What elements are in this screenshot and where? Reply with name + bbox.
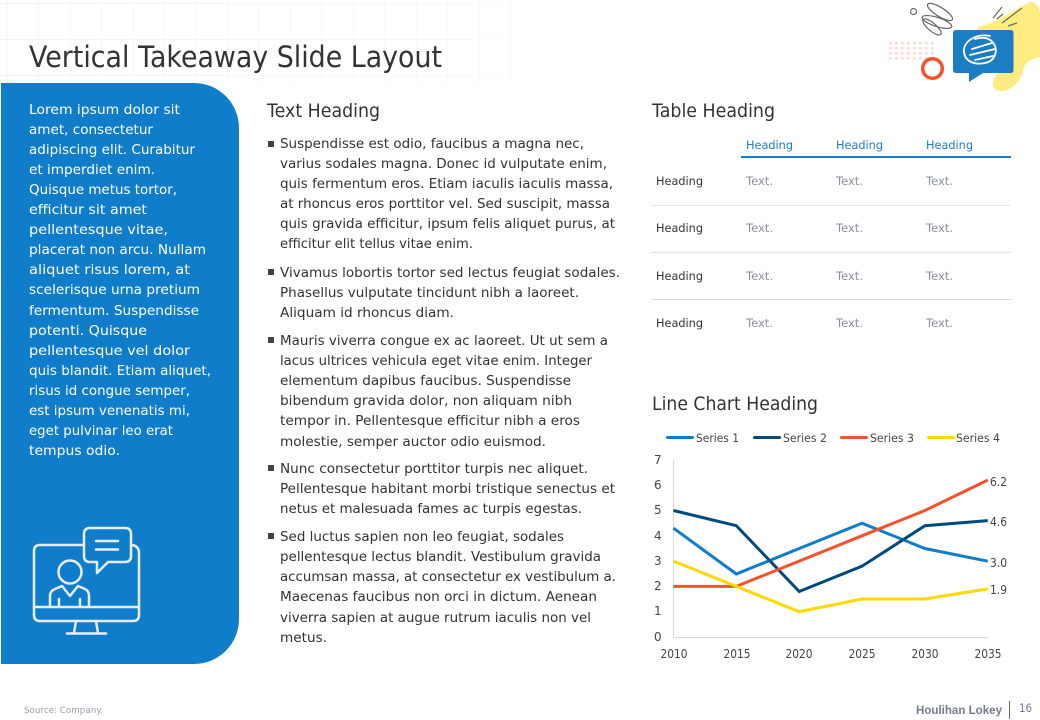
footer logo wordmark: Houlihan Lokey	[916, 703, 1002, 717]
chart axes: 2035	[974, 647, 1002, 661]
takeaway text: tempus odio.	[29, 443, 120, 459]
chart axes: 1	[654, 604, 662, 618]
takeaway text: pellentesque vel dolor	[29, 343, 190, 359]
bullet list: viverra sapien at augue rutrum iaculis non vel	[280, 611, 591, 626]
chart axes: 2030	[912, 647, 938, 661]
table row 4	[656, 316, 953, 330]
bullet list: Nunc consectetur porttitor turpis nec aliquet.	[280, 462, 588, 477]
table row 3: Text.	[745, 269, 773, 283]
bullet list: bibendum gravida dolor, non aliquam nibh	[280, 394, 572, 409]
table row 3: Text.	[925, 269, 953, 283]
chart axes: 2	[654, 579, 662, 593]
table row 1: Heading	[656, 174, 703, 188]
table row 2: Text.	[835, 221, 863, 235]
panel: line chart	[652, 393, 1007, 661]
bullet list: tempor in. Pellentesque efficitur nibh a eros	[280, 414, 580, 429]
chart legend: Series 4	[956, 431, 1000, 445]
table header row: Heading	[836, 138, 883, 152]
takeaway text: efficitur sit amet	[29, 202, 147, 218]
data labels	[990, 475, 1007, 597]
table header row: Heading	[746, 138, 793, 152]
bullet list: netus et malesuada fames ac turpis egestas.	[280, 502, 582, 517]
bullet list	[268, 137, 620, 646]
table row 4: Text.	[745, 316, 773, 330]
data labels: 4.6	[990, 515, 1007, 529]
takeaway text: pellentesque vitae,	[29, 222, 168, 238]
chart legend	[666, 431, 1000, 445]
heading: text: Text Heading	[266, 100, 380, 122]
takeaway text	[29, 102, 211, 459]
table row 1: Text.	[745, 174, 773, 188]
chart axes: 5	[654, 503, 662, 517]
table row 1: Text.	[835, 174, 863, 188]
series 2 line	[674, 510, 988, 592]
bullet list: Phasellus vulputate tincidunt nibh a laoreet.	[280, 286, 579, 301]
table row 3: Text.	[835, 269, 863, 283]
table row 2: Text.	[925, 221, 953, 235]
table row 1	[656, 174, 953, 188]
footer source note: Source: Company.	[24, 706, 103, 716]
chart axes: 4	[654, 529, 662, 543]
chart legend: Series 1	[696, 431, 739, 445]
panel: vertical takeaway	[1, 83, 239, 664]
table row 4: Text.	[835, 316, 863, 330]
data labels: 1.9	[990, 583, 1007, 597]
table row 3	[656, 269, 953, 283]
chart axes: 2020	[786, 647, 812, 661]
bullet list: efficitur elit tellus vitae enim.	[280, 237, 473, 252]
takeaway text: adipiscing elit. Curabitur	[29, 142, 195, 158]
bullet list: varius sodales magna. Donec id vulputate enim,	[280, 157, 607, 172]
chart axes: 2010	[660, 647, 688, 661]
takeaway text: amet, consectetur	[29, 122, 153, 138]
bullet list: Maecenas faucibus non orci in dictum. Aenean	[280, 590, 597, 605]
chart axes: 0	[654, 630, 662, 644]
heading: table: Table Heading	[651, 100, 775, 122]
chart axes: 6	[654, 478, 662, 492]
takeaway text: eget pulvinar leo erat	[29, 423, 173, 439]
bullet list: pellentesque lectus blandit. Vestibulum gravida	[280, 550, 601, 565]
bullet list: Sed luctus sapien non leo feugiat, sodales	[280, 530, 564, 545]
series 3 line	[674, 480, 988, 586]
takeaway text: scelerisque urna pretium	[29, 282, 200, 298]
title: Vertical Takeaway Slide Layout	[29, 40, 442, 74]
bullet list: elementum dapibus faucibus. Suspendisse	[280, 374, 571, 389]
chart axes: 7	[654, 453, 662, 467]
bullet list: accumsan massa, at consectetur ex vestibulum a.	[280, 570, 616, 585]
icon: decorative chat bubble header graphic	[889, 0, 1040, 91]
chart axes: 2025	[848, 647, 876, 661]
chart axes: 3	[654, 554, 662, 568]
takeaway text: Quisque metus tortor,	[29, 182, 177, 198]
table row 4: Text.	[925, 316, 953, 330]
icon: presenter on monitor with speech bubble	[34, 528, 139, 634]
bullet list: quis gravida efficitur, ipsum felis aliquet purus, at	[280, 217, 615, 232]
bullet list: molestie, semper auctor odio euismod.	[280, 435, 546, 450]
takeaway text: et imperdiet enim.	[29, 162, 155, 178]
data labels: 6.2	[990, 475, 1007, 489]
table row 2	[656, 221, 953, 235]
table row 2: Text.	[745, 221, 773, 235]
bullet list: quis fermentum eros. Etiam iaculis iaculis massa,	[280, 177, 613, 192]
chart legend: Series 2	[783, 431, 827, 445]
table row 3: Heading	[656, 269, 703, 283]
bullet list: Mauris viverra congue ex ac laoreet. Ut ut sem a	[280, 334, 608, 349]
takeaway text: est ipsum venenatis mi,	[29, 403, 190, 419]
page number: 16	[1019, 701, 1032, 715]
bullet list: at rhoncus eros porttitor vel. Sed suscipit, massa	[280, 197, 610, 212]
bullet list: Pellentesque habitant morbi tristique senectus et	[280, 482, 615, 497]
series 4 line	[674, 561, 988, 612]
panel: text column	[266, 100, 620, 646]
takeaway text: quis blandit. Etiam aliquet,	[29, 363, 211, 379]
heading: line chart: Line Chart Heading	[652, 393, 818, 415]
table row 2: Heading	[656, 221, 703, 235]
bullet list: lacus ultrices vehicula eget vitae enim. Integer	[280, 354, 593, 369]
table header row	[741, 138, 1011, 158]
takeaway text: aliquet risus lorem, at	[29, 262, 190, 278]
takeaway text: Lorem ipsum dolor sit	[29, 102, 180, 118]
chart axes	[654, 453, 1002, 661]
takeaway text: fermentum. Suspendisse	[29, 303, 199, 319]
bullet list: Suspendisse est odio, faucibus a magna nec,	[280, 137, 584, 152]
data labels: 3.0	[990, 556, 1007, 570]
bullet list: Vivamus lobortis tortor sed lectus feugiat sodales.	[280, 266, 620, 281]
chart axes: 2015	[724, 647, 750, 661]
panel: table	[651, 100, 1011, 330]
table row 1: Text.	[925, 174, 953, 188]
series 1 line	[674, 523, 988, 574]
bullet list: metus.	[280, 631, 327, 646]
takeaway text: potenti. Quisque	[29, 323, 147, 339]
takeaway text: placerat non arcu. Nullam	[29, 242, 206, 258]
takeaway text: risus id congue semper,	[29, 383, 190, 399]
chart legend: Series 3	[870, 431, 914, 445]
table row 4: Heading	[656, 316, 703, 330]
table header row: Heading	[926, 138, 973, 152]
bullet list: Aliquam id rhoncus diam.	[280, 306, 454, 321]
